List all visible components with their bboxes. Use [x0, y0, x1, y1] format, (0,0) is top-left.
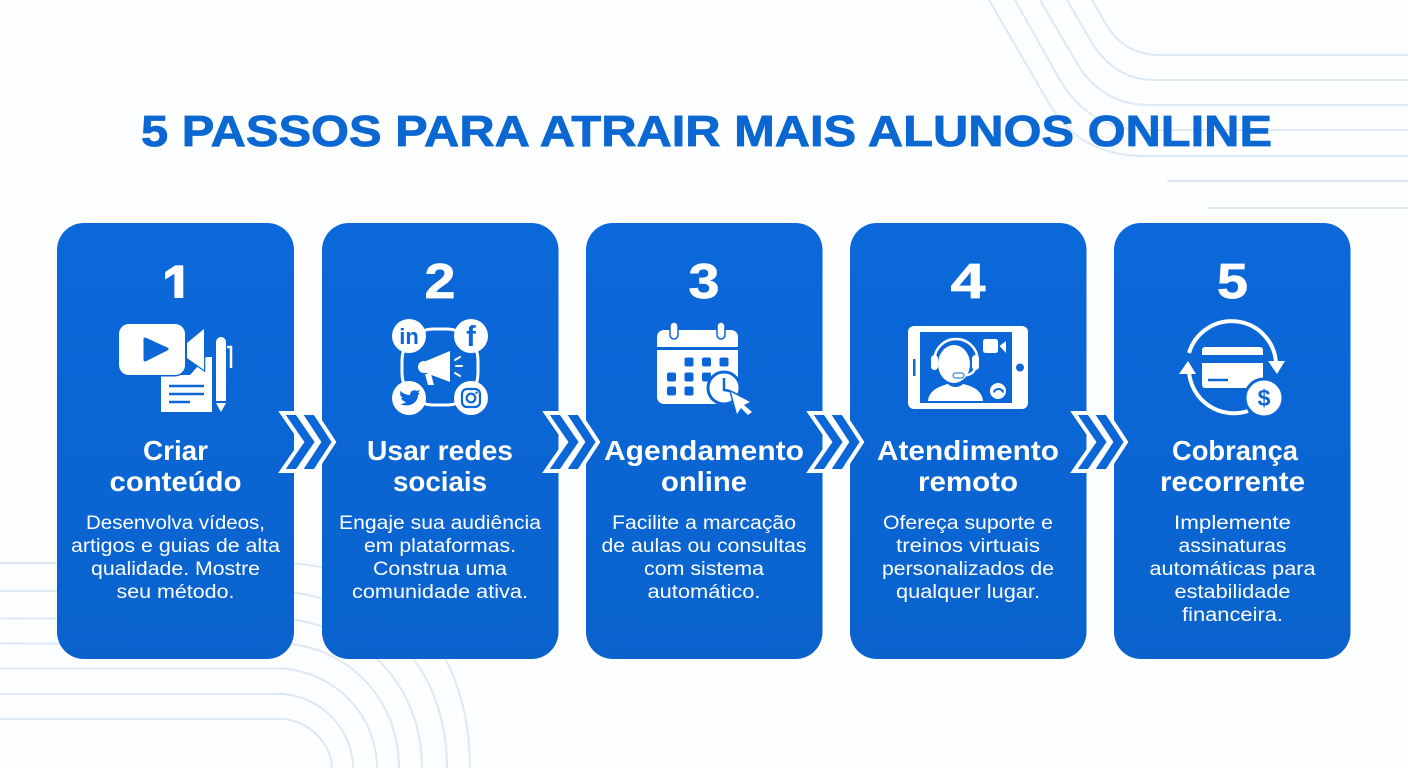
step heading	[1160, 435, 1305, 497]
step description	[1150, 513, 1316, 626]
step description: Desenvolva vídeos,	[86, 513, 265, 534]
title: 5 PASSOS PARA ATRAIR MAIS ALUNOS ONLINE	[141, 107, 1272, 156]
arrow: step 1 to 2	[282, 413, 334, 471]
step heading	[877, 435, 1059, 497]
step description: qualidade. Mostre	[91, 559, 260, 580]
step heading: remoto	[918, 466, 1018, 497]
icon: social networks and megaphone	[392, 319, 488, 415]
step description	[882, 513, 1054, 603]
step heading	[367, 435, 513, 497]
step heading: online	[661, 466, 747, 497]
step description: Implemente	[1174, 513, 1291, 534]
step description: assinaturas	[1178, 536, 1286, 557]
step description	[602, 513, 806, 603]
step heading: recorrente	[1160, 466, 1305, 497]
icon: social networks and megaphone: f	[466, 321, 476, 353]
step heading: sociais	[393, 466, 487, 497]
step description: em plataformas.	[364, 536, 516, 557]
step description: Ofereça suporte e	[883, 513, 1053, 534]
step description	[339, 513, 541, 603]
step description: com sistema	[644, 559, 764, 580]
icon: tablet video call	[908, 326, 1028, 409]
step description: de aulas ou consultas	[602, 536, 806, 557]
panel: step 1	[57, 223, 294, 659]
step description: treinos virtuais	[896, 536, 1040, 557]
step description: Construa uma	[373, 559, 507, 580]
step heading: Usar redes	[367, 435, 513, 466]
step heading: Criar	[143, 435, 208, 466]
step description: seu método.	[116, 582, 234, 603]
step heading: Atendimento	[877, 435, 1059, 466]
panel: step 2	[322, 223, 558, 659]
step description: personalizados de	[882, 559, 1054, 580]
step description: automático.	[648, 582, 760, 603]
step description: Engaje sua audiência	[339, 513, 541, 534]
step heading: Agendamento	[604, 435, 804, 466]
step heading: conteúdo	[110, 466, 242, 497]
icon: social networks and megaphone: in	[399, 324, 419, 349]
arrow: step 3 to 4	[810, 413, 862, 471]
panel: step 5	[1114, 223, 1350, 659]
icon: recurring card payment	[1179, 321, 1285, 417]
step number 3: 3	[688, 255, 720, 309]
step description: qualquer lugar.	[896, 582, 1040, 603]
step description	[71, 513, 280, 603]
step heading	[110, 435, 242, 497]
step number 4: 4	[950, 255, 986, 309]
icon: recurring card payment: $	[1258, 385, 1271, 411]
step number 1: 1	[162, 254, 193, 318]
icon: calendar with clock and cursor	[657, 322, 752, 415]
step heading: Cobrança	[1172, 435, 1299, 466]
step number 2: 2	[424, 255, 456, 309]
arrow: step 2 to 3	[546, 413, 598, 471]
arrow: step 4 to 5	[1074, 413, 1126, 471]
panel: step 4	[850, 223, 1086, 659]
step description: automáticas para	[1150, 559, 1316, 580]
step description: estabilidade	[1174, 582, 1290, 603]
step description: comunidade ativa.	[352, 582, 528, 603]
step description: Facilite a marcação	[612, 513, 796, 534]
step description: financeira.	[1182, 605, 1283, 626]
step heading	[604, 435, 804, 497]
panel: step 3	[586, 223, 822, 659]
step description: artigos e guias de alta	[71, 536, 280, 557]
step number 5: 5	[1217, 255, 1248, 309]
icon: video and document	[119, 324, 231, 412]
